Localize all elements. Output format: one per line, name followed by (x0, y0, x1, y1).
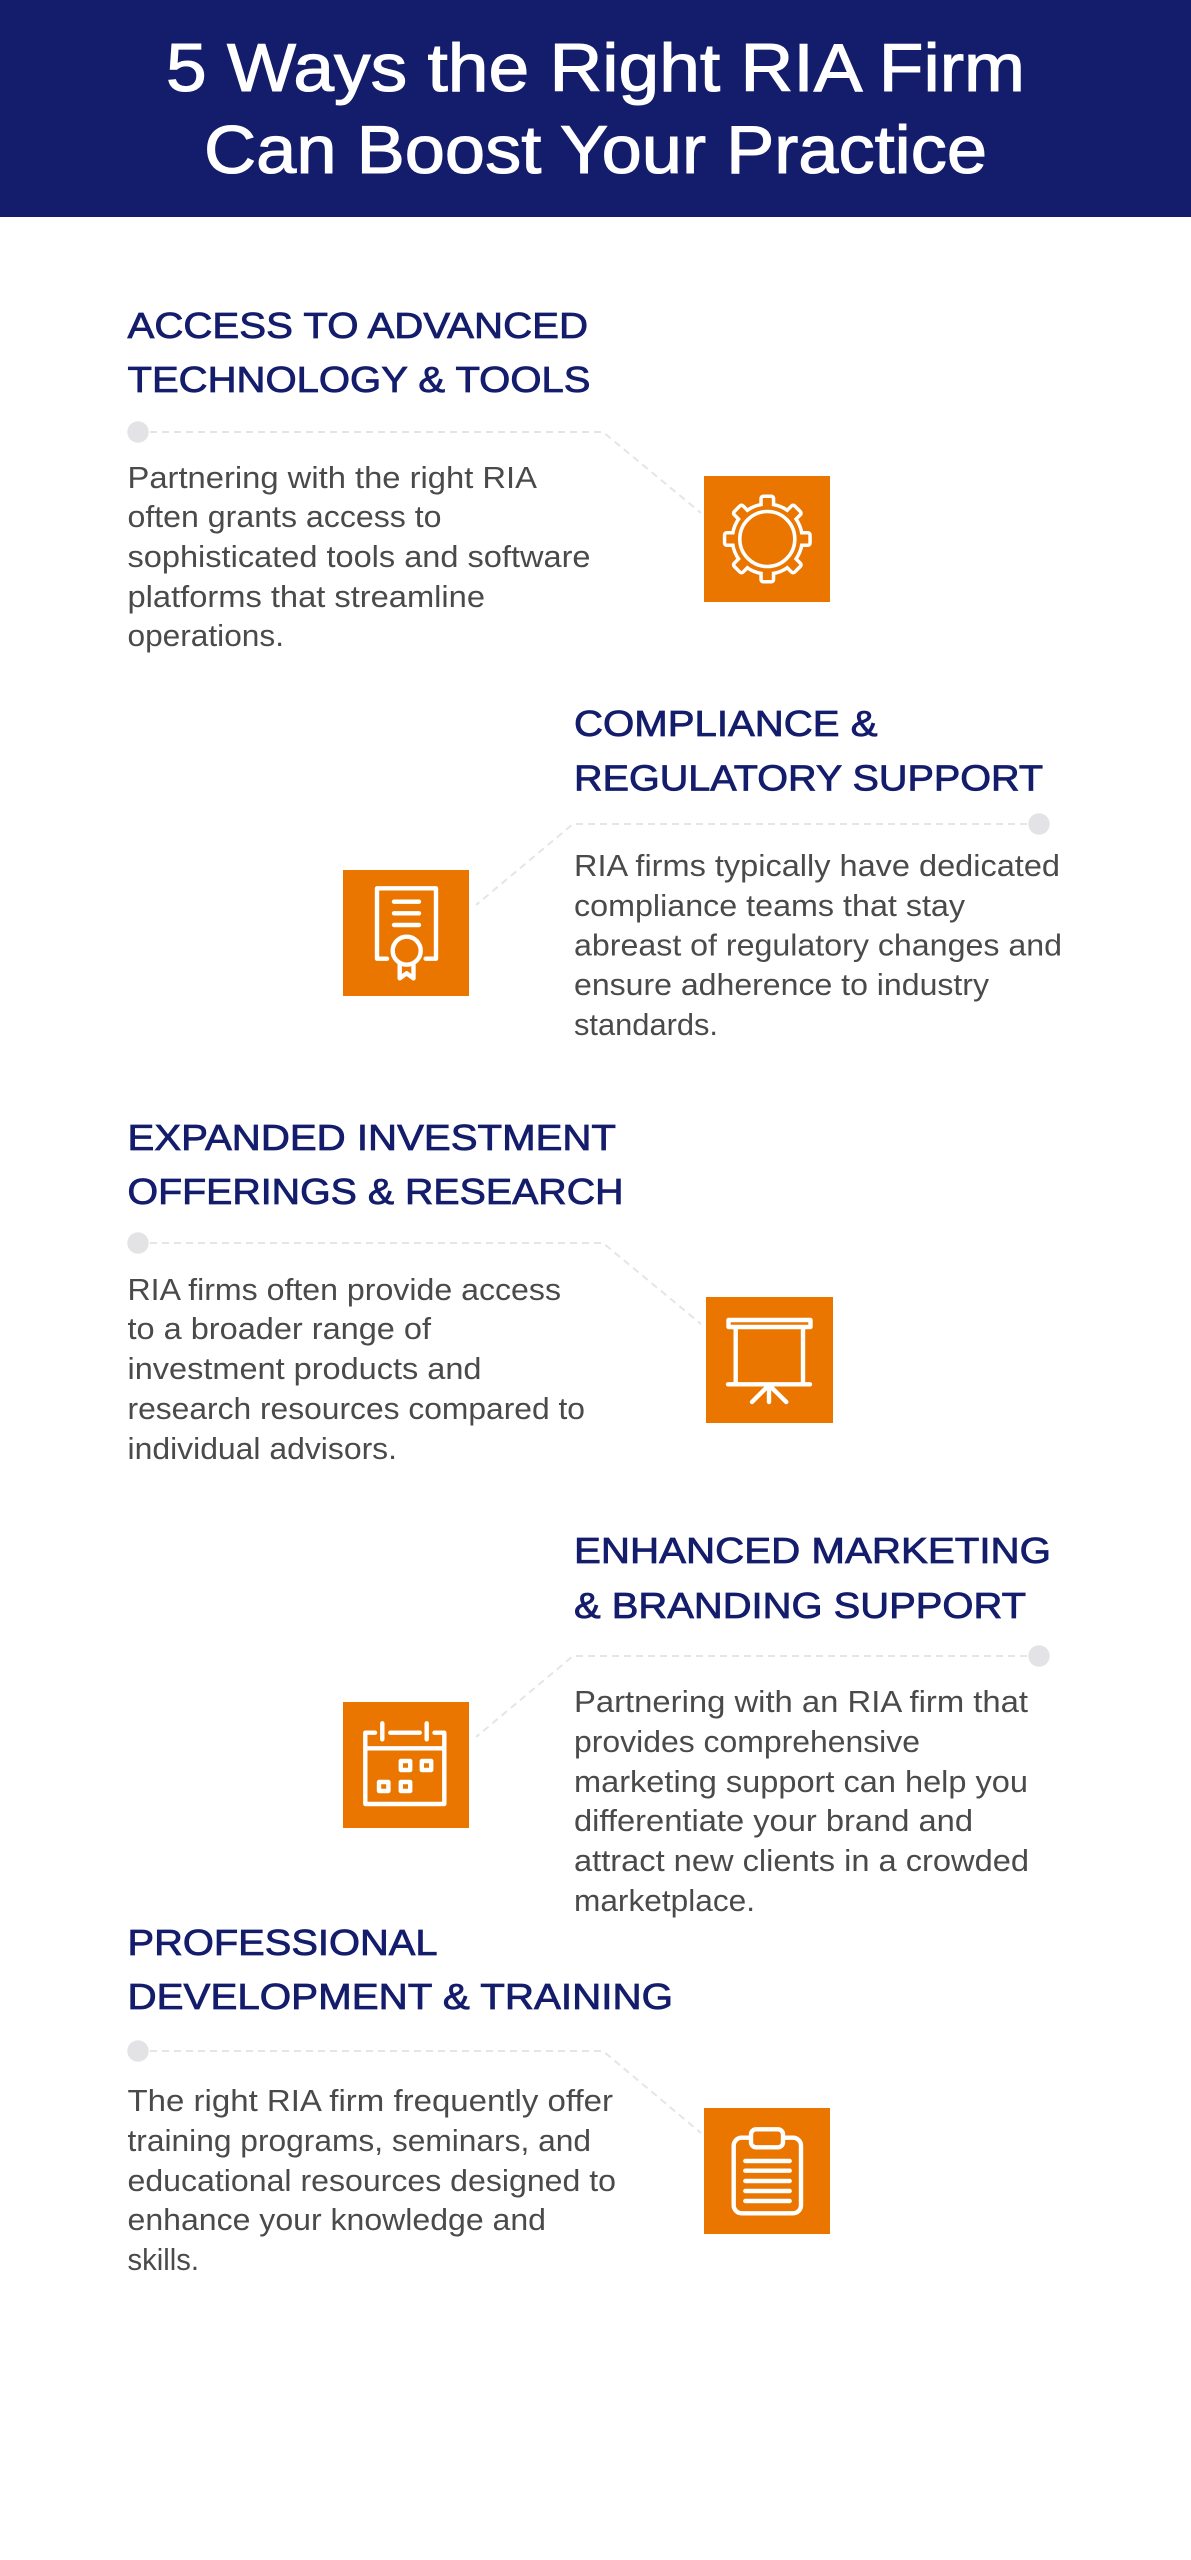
icon: projector screen (706, 1297, 833, 1423)
body text (574, 1685, 1029, 1918)
panel: compliance and regulatory support (343, 703, 1062, 1042)
heading: TECHNOLOGY & TOOLS (128, 359, 590, 400)
body text: sophisticated tools and software (128, 540, 590, 574)
body text: ensure adherence to industry (574, 968, 990, 1002)
heading: PROFESSIONAL (128, 1922, 438, 1963)
body text: enhance your knowledge and (128, 2203, 546, 2237)
body text: often grants access to (128, 500, 442, 534)
body text: operations. (128, 619, 284, 653)
body text: platforms that streamline (128, 580, 485, 614)
body text: abreast of regulatory changes and (574, 928, 1062, 962)
body text: investment products and (128, 1352, 481, 1386)
panel: expanded investment offerings and research (127, 1117, 833, 1466)
body text: marketing support can help you (574, 1765, 1028, 1799)
icon: clipboard (704, 2108, 830, 2234)
connector with dot (127, 421, 701, 513)
body text: marketplace. (574, 1884, 755, 1918)
heading (574, 703, 1043, 798)
body text: educational resources designed to (128, 2164, 616, 2198)
heading: EXPANDED INVESTMENT (128, 1117, 616, 1158)
icon: calendar (343, 1702, 469, 1828)
body text: Partnering with an RIA firm that (574, 1685, 1029, 1719)
heading (128, 305, 590, 400)
body text (128, 1273, 585, 1466)
heading: COMPLIANCE & (574, 703, 878, 744)
connector with dot (476, 813, 1050, 905)
heading: DEVELOPMENT & TRAINING (128, 1976, 673, 2017)
heading (574, 1530, 1051, 1626)
title: 5 Ways the Right RIA Firm (166, 30, 1025, 106)
icon: certificate (343, 870, 469, 996)
panel: enhanced marketing and branding support (343, 1530, 1051, 1918)
body text: differentiate your brand and (574, 1804, 973, 1838)
header banner (0, 0, 1191, 217)
body text: skills. (128, 2243, 199, 2277)
body text: research resources compared to (128, 1392, 585, 1426)
body text: attract new clients in a crowded (574, 1844, 1029, 1878)
body text: Partnering with the right RIA (128, 461, 538, 495)
heading (128, 1922, 673, 2017)
body text: provides comprehensive (574, 1725, 920, 1759)
heading: REGULATORY SUPPORT (574, 758, 1043, 798)
heading: ENHANCED MARKETING (574, 1530, 1051, 1571)
body text: training programs, seminars, and (128, 2124, 591, 2158)
body text: individual advisors. (128, 1432, 397, 1466)
body text: RIA firms often provide access (128, 1273, 561, 1307)
title: Can Boost Your Practice (204, 112, 987, 188)
panel: professional development and training (127, 1922, 830, 2277)
icon: gear (704, 476, 830, 602)
connector with dot (127, 2040, 701, 2133)
heading: & BRANDING SUPPORT (574, 1585, 1026, 1626)
body text (574, 849, 1062, 1042)
connector with dot (127, 1232, 701, 1324)
heading: ACCESS TO ADVANCED (128, 305, 588, 346)
body text (128, 461, 590, 653)
body text: standards. (574, 1008, 718, 1042)
heading: OFFERINGS & RESEARCH (128, 1171, 624, 1212)
body text: RIA firms typically have dedicated (574, 849, 1060, 883)
body text: compliance teams that stay (574, 889, 966, 923)
body text (128, 2084, 616, 2277)
connector with dot (476, 1645, 1050, 1737)
panel: access to advanced technology and tools (127, 305, 830, 653)
title (166, 30, 1025, 188)
heading (128, 1117, 624, 1212)
body text: to a broader range of (128, 1312, 432, 1346)
body text: The right RIA firm frequently offer (128, 2084, 613, 2118)
